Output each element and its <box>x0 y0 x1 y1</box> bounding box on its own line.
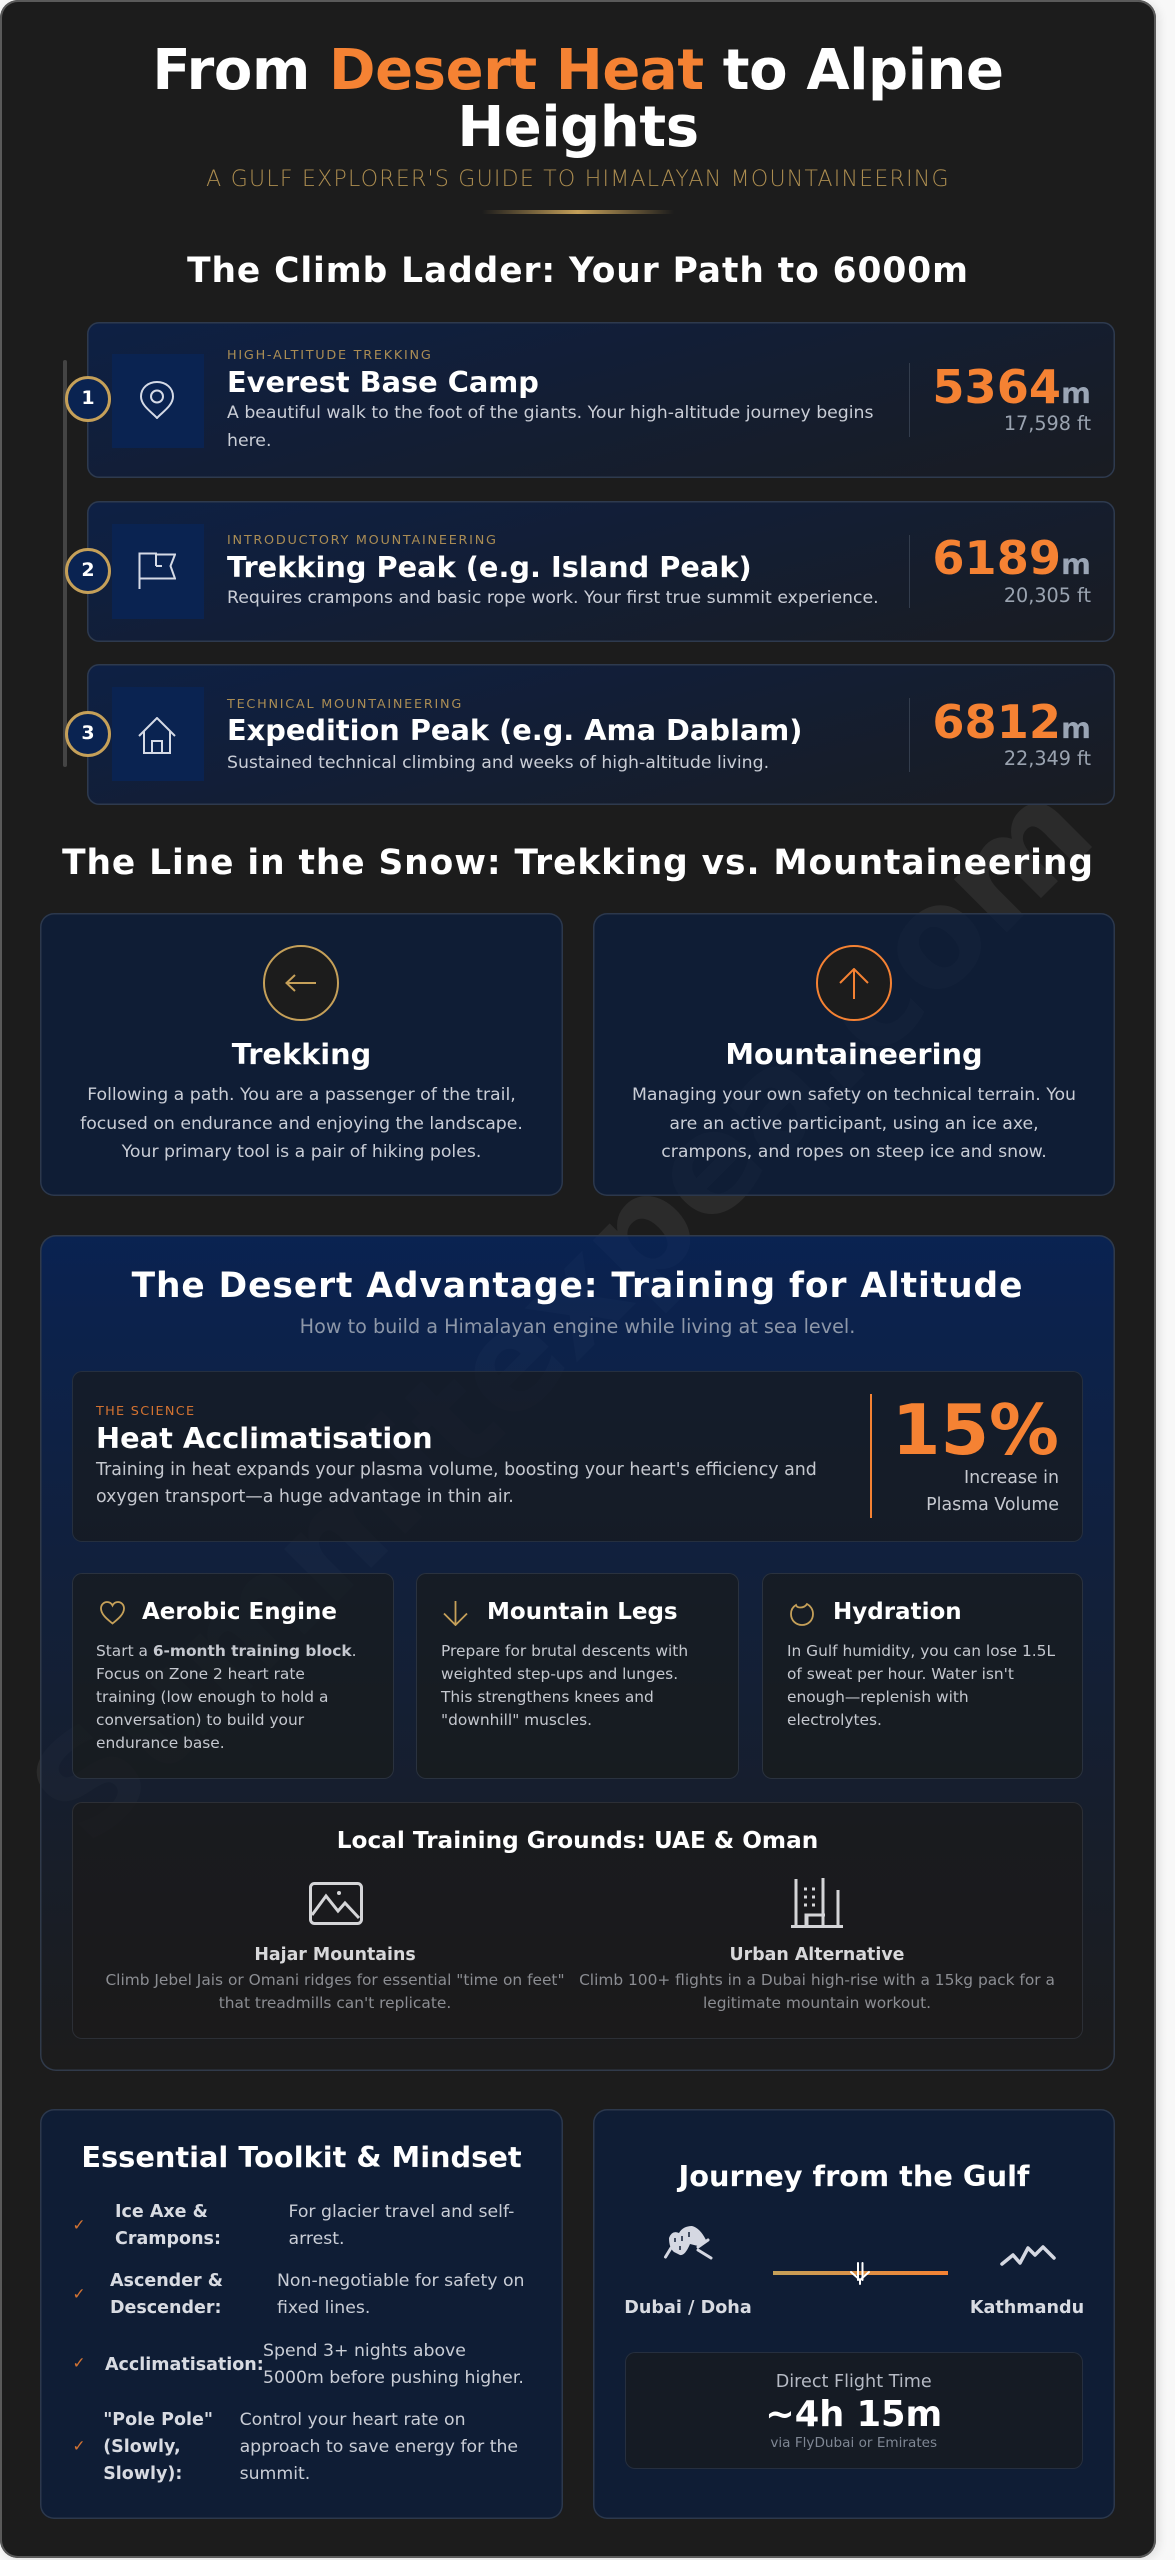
description: Your primary tool is a pair of hiking poles. <box>122 1142 481 1162</box>
description: focused on endurance and enjoying the landscape. <box>80 1114 523 1134</box>
description <box>80 1085 523 1162</box>
description: that treadmills can't replicate. <box>219 1994 451 2012</box>
detail: arrest. <box>288 2229 345 2249</box>
term <box>115 2202 221 2249</box>
feet: 20,305 ft <box>1004 584 1091 607</box>
description: Training in heat expands your plasma volume, boosting your heart's efficiency and <box>96 1460 817 1480</box>
panel: desert advantage <box>40 1235 1115 2071</box>
detail: 5000m before pushing higher. <box>263 2368 524 2388</box>
body <box>96 1642 356 1752</box>
body: enough—replenish with <box>787 1688 969 1706</box>
card: Trekking Peak <box>87 501 1115 642</box>
body: weighted step-ups and lunges. <box>441 1665 678 1683</box>
watermark: Summitexpea.com <box>0 750 1123 1873</box>
term: Ice Axe & <box>115 2202 208 2222</box>
stat: 15%: 15% <box>892 1390 1059 1471</box>
term: Crampons: <box>115 2229 221 2249</box>
panel: essential toolkit <box>40 2109 563 2519</box>
stat label: Plasma Volume <box>926 1494 1059 1514</box>
detail <box>263 2341 524 2388</box>
item: pole pole <box>72 2410 518 2484</box>
name: Trekking Peak (e.g. Island Peak) <box>227 550 752 584</box>
detail: Control your heart rate on <box>240 2410 466 2430</box>
description: legitimate mountain workout. <box>703 1994 931 2012</box>
column: Urban Alternative <box>579 1878 1055 2012</box>
body: of sweat per hour. Water isn't <box>787 1665 1014 1683</box>
card: Expedition Peak <box>87 664 1115 805</box>
subheading: How to build a Himalayan engine while living at sea level. <box>300 1315 855 1338</box>
airlines: via FlyDubai or Emirates <box>770 2435 937 2451</box>
step number 1: 1 <box>81 387 95 409</box>
step number 1 <box>65 376 111 422</box>
panel: mountaineering <box>593 913 1115 1196</box>
description <box>579 1970 1055 2012</box>
timeline line <box>63 360 67 767</box>
heading: The Desert Advantage: Training for Altitude <box>132 1266 1023 1306</box>
heading: climb ladder: The Climb Ladder: Your Path to 6000m <box>187 251 969 291</box>
heading: Journey from the Gulf <box>679 2159 1029 2193</box>
description <box>105 1970 565 2012</box>
detail: approach to save energy for the <box>240 2436 518 2456</box>
divider <box>909 535 910 608</box>
body: electrolytes. <box>787 1711 882 1729</box>
description: Requires crampons and basic rope work. Your first true summit experience. <box>227 588 879 608</box>
check: ✓ <box>72 2285 86 2303</box>
heading: trekking vs mountaineering: The Line in the Snow: Trekking vs. Mountaineering <box>62 843 1094 883</box>
feet: 17,598 ft <box>1004 412 1091 435</box>
feet: 22,349 ft <box>1004 747 1091 770</box>
column: Hajar Mountains <box>105 1882 565 2012</box>
check: ✓ <box>72 2436 86 2454</box>
altitude: 5364m <box>932 360 1091 414</box>
term <box>110 2271 223 2318</box>
icon: up arrow <box>816 945 892 1021</box>
time: ~4h 15m <box>765 2394 942 2435</box>
body <box>440 1642 688 1729</box>
detail: summit. <box>240 2464 310 2484</box>
title divider <box>482 210 674 214</box>
body: Focus on Zone 2 heart rate <box>96 1665 305 1683</box>
body: Prepare for brutal descents with <box>441 1642 688 1660</box>
item: ice axe <box>72 2202 514 2249</box>
icon: mountains <box>1002 2247 1054 2264</box>
description: crampons, and ropes on steep ice and snow. <box>661 1142 1047 1162</box>
step number 2 <box>65 548 111 594</box>
panel: local training grounds <box>72 1802 1083 2039</box>
description: Managing your own safety on technical terrain. You <box>632 1085 1076 1105</box>
route graphic <box>664 2226 1056 2285</box>
detail <box>288 2202 514 2249</box>
body: In Gulf humidity, you can lose 1.5L <box>787 1642 1055 1660</box>
icon: heart <box>100 1601 125 1624</box>
heading: Mountaineering <box>725 1037 983 1071</box>
label: Direct Flight Time <box>776 2372 932 2392</box>
card: Everest Base Camp <box>87 322 1115 478</box>
label: TECHNICAL MOUNTAINEERING <box>227 697 463 712</box>
check: ✓ <box>72 2354 86 2372</box>
body: Start a 6-month training block. <box>96 1642 356 1660</box>
heading: Trekking <box>232 1037 371 1071</box>
body: "downhill" muscles. <box>441 1711 592 1729</box>
detail: Non-negotiable for safety on <box>277 2271 524 2291</box>
term: Acclimatisation: <box>105 2354 264 2374</box>
icon: left arrow <box>263 945 339 1021</box>
term <box>103 2410 213 2484</box>
term: "Pole Pole" <box>103 2410 213 2430</box>
card: mountain legs <box>416 1573 739 1779</box>
icon: plane <box>851 2263 869 2284</box>
description: A beautiful walk to the foot of the giants. Your high-altitude journey begins <box>227 403 874 423</box>
term: Descender: <box>110 2298 222 2318</box>
detail <box>277 2271 524 2318</box>
detail: Spend 3+ nights above <box>263 2341 466 2361</box>
step number 3: 3 <box>81 722 95 744</box>
body: This strengthens knees and <box>441 1688 654 1706</box>
description: oxygen transport—a huge advantage in thin air. <box>96 1486 514 1506</box>
label: HIGH-ALTITUDE TREKKING <box>227 348 433 363</box>
item: ascender <box>72 2271 524 2318</box>
label: THE SCIENCE <box>96 1404 195 1419</box>
card: aerobic engine <box>72 1573 394 1779</box>
description <box>632 1085 1076 1162</box>
body: conversation) to build your <box>96 1711 304 1729</box>
description <box>96 1460 817 1506</box>
detail <box>240 2410 518 2484</box>
icon: map pin <box>112 354 204 448</box>
title <box>152 38 1004 160</box>
stat label: Increase in <box>964 1468 1059 1488</box>
divider <box>909 698 910 772</box>
flight time box <box>624 2352 1083 2469</box>
check: ✓ <box>72 2216 86 2234</box>
name: Hajar Mountains <box>254 1945 416 1965</box>
subtitle: A GULF EXPLORER'S GUIDE TO HIMALAYAN MOUNTAINEERING <box>206 167 950 192</box>
description <box>227 403 874 451</box>
label: INTRODUCTORY MOUNTAINEERING <box>227 533 498 548</box>
heading: Essential Toolkit & Mindset <box>81 2140 522 2174</box>
altitude: 6189m <box>932 531 1091 585</box>
term: Slowly): <box>103 2464 182 2484</box>
term: (Slowly, <box>103 2436 181 2456</box>
altitude: 6812m <box>932 695 1091 749</box>
icon: down arrow <box>443 1601 468 1626</box>
icon: landscape photo <box>309 1882 363 1925</box>
heading: Mountain Legs <box>487 1599 678 1625</box>
title: From Desert Heat to Alpine <box>152 38 1004 103</box>
name: Everest Base Camp <box>227 365 539 399</box>
heading: Hydration <box>833 1599 962 1625</box>
detail: For glacier travel and self- <box>288 2202 514 2222</box>
term: Ascender & <box>110 2271 223 2291</box>
name: Urban Alternative <box>730 1945 904 1965</box>
heading: Aerobic Engine <box>142 1599 337 1625</box>
name: Expedition Peak (e.g. Ama Dablam) <box>227 713 802 747</box>
description: Following a path. You are a passenger of the trail, <box>87 1085 516 1105</box>
detail: fixed lines. <box>277 2298 370 2318</box>
icon: hydration <box>790 1602 814 1626</box>
body: endurance base. <box>96 1734 225 1752</box>
panel: climb ladder <box>63 322 1115 805</box>
title: Heights <box>457 94 699 160</box>
card: hydration <box>762 1573 1083 1779</box>
body: training (low enough to hold a <box>96 1688 328 1706</box>
icon: flag <box>112 524 204 619</box>
description: here. <box>227 431 271 451</box>
panel: trekking <box>40 913 563 1196</box>
icon: house <box>112 687 204 781</box>
origin label: Dubai / Doha <box>624 2298 752 2318</box>
divider <box>870 1394 872 1518</box>
divider <box>909 363 910 437</box>
card: heat acclimatisation <box>72 1371 1083 1542</box>
body <box>787 1642 1055 1729</box>
description: Climb 100+ flights in a Dubai high-rise with a 15kg pack for a <box>579 1970 1055 1988</box>
description: Sustained technical climbing and weeks of high-altitude living. <box>227 753 769 773</box>
stat label <box>926 1468 1059 1514</box>
heading: Heat Acclimatisation <box>96 1421 433 1455</box>
description: Climb Jebel Jais or Omani ridges for essential "time on feet" <box>105 1970 565 1988</box>
destination label: Kathmandu <box>970 2298 1084 2318</box>
step number 2: 2 <box>81 559 95 581</box>
panel: journey from the gulf <box>593 2109 1115 2519</box>
step number 3 <box>65 711 111 757</box>
item: acclimatisation <box>72 2341 524 2388</box>
icon: origin <box>666 2226 711 2258</box>
icon: buildings <box>791 1878 843 1928</box>
heading: Local Training Grounds: UAE & Oman <box>337 1827 818 1854</box>
description: are an active participant, using an ice axe, <box>669 1114 1039 1134</box>
